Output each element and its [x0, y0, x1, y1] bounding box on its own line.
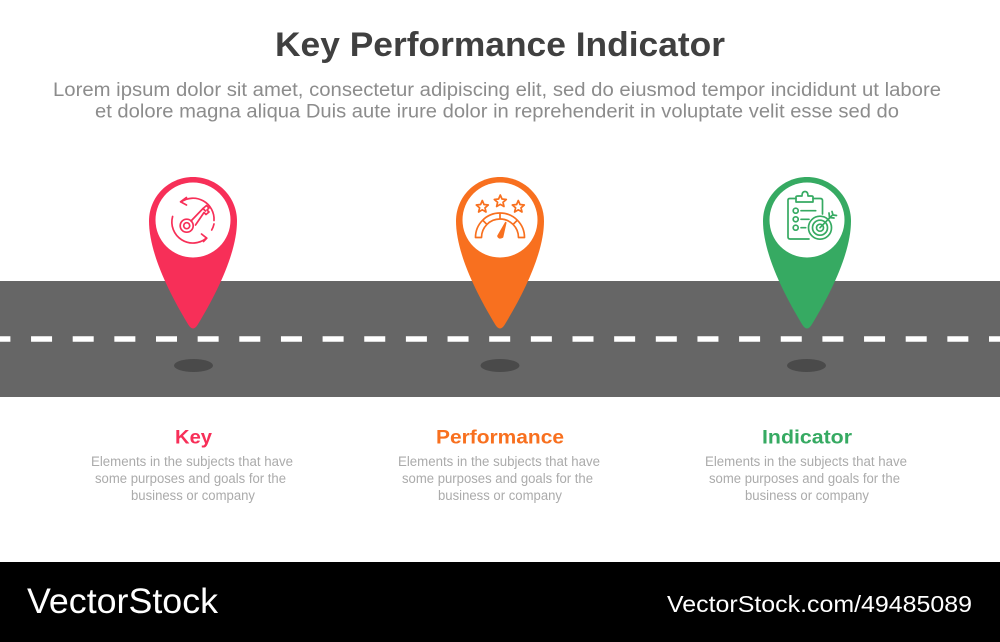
caption: performance	[398, 428, 600, 503]
description: indicator: business or company	[745, 488, 869, 503]
caption: indicator	[705, 428, 907, 503]
description: key: some purposes and goals for the	[95, 471, 286, 486]
description: performance: Elements in the subjects that have	[398, 454, 600, 469]
footer bar	[0, 562, 1000, 642]
pin shadow: performance	[480, 359, 520, 372]
description: key	[91, 454, 293, 503]
pin: key	[149, 177, 237, 328]
subtitle text block: Lorem ipsum dolor sit amet, consectetur adipiscing elit, sed do eiusmod tempor incididunt ut labore	[53, 80, 941, 101]
road	[0, 281, 1000, 397]
pin: indicator	[763, 177, 851, 328]
description: key: Elements in the subjects that have	[91, 454, 293, 469]
caption: indicator: Indicator	[762, 428, 853, 448]
road centre dashes	[0, 336, 1000, 342]
pin shadow: indicator	[787, 359, 826, 372]
icon: clipboard with target	[788, 192, 836, 239]
description: indicator: some purposes and goals for the	[709, 471, 900, 486]
caption: performance: Performance	[436, 428, 564, 448]
pin: performance	[456, 177, 544, 328]
subtitle text block	[53, 80, 941, 122]
pin shadow: key	[174, 359, 213, 372]
caption: key	[91, 428, 293, 503]
description: performance: some purposes and goals for the	[402, 471, 593, 486]
description: indicator	[705, 454, 907, 503]
footer logo text: VectorStock	[27, 582, 219, 621]
description: performance	[398, 454, 600, 503]
icon: key with rotating arrows	[172, 198, 214, 243]
footer image id: VectorStock.com/49485089	[667, 591, 972, 617]
icon: gauge with three stars	[476, 195, 524, 238]
description: key: business or company	[131, 488, 255, 503]
caption: key: Key	[175, 428, 212, 448]
title: Key Performance Indicator	[275, 26, 725, 64]
description: indicator: Elements in the subjects that have	[705, 454, 907, 469]
subtitle text block: et dolore magna aliqua Duis aute irure dolor in reprehenderit in voluptate velit esse sed do	[95, 102, 899, 122]
description: performance: business or company	[438, 488, 562, 503]
